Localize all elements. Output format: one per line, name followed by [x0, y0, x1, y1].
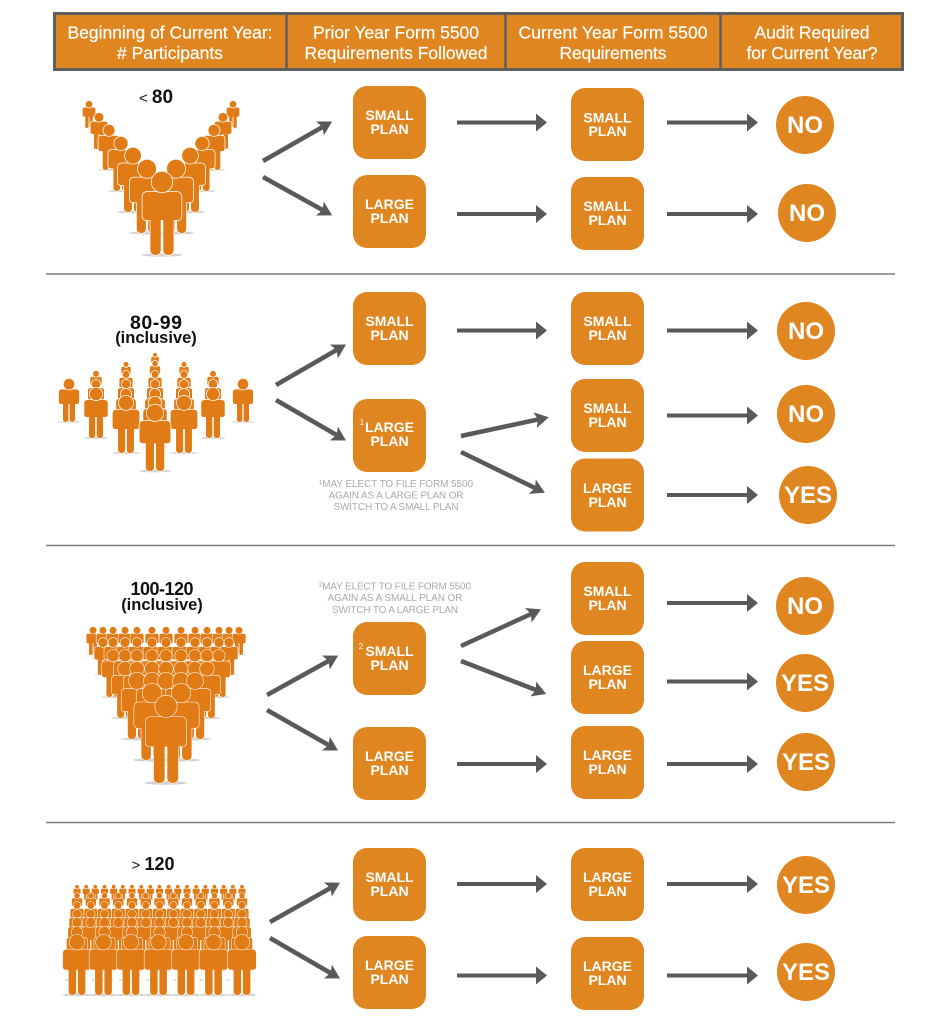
box: current small plan: PLAN — [588, 597, 627, 613]
box: prior small plan — [353, 86, 426, 159]
box: current large plan — [571, 458, 644, 532]
label: 80-99 inclusive: 80-99 — [130, 312, 182, 334]
people icon: crowd — [62, 885, 257, 996]
box: prior large plan: PLAN — [370, 971, 409, 987]
header: participants: # Participants — [117, 43, 223, 63]
box: current large plan: PLAN — [588, 883, 627, 899]
box: prior small plan with footnote marker: 2 — [359, 642, 364, 651]
box: prior small plan with footnote marker: PLAN — [370, 657, 409, 673]
badge: yes — [777, 943, 835, 1001]
badge: no — [777, 302, 835, 360]
people icon: inverted triangle formation — [86, 627, 246, 785]
badge: no — [776, 96, 834, 154]
label: over 120: > 120 — [132, 854, 174, 874]
box: prior large plan — [353, 727, 426, 800]
box: prior small plan: PLAN — [370, 883, 409, 899]
box: current small plan: PLAN — [588, 414, 627, 430]
box: prior small plan with footnote marker: SMALL — [365, 643, 414, 659]
footnote 1: ¹MAY ELECT TO FILE FORM 5500 — [319, 479, 473, 490]
badge: no — [777, 385, 835, 443]
box: prior large plan: LARGE — [365, 957, 414, 973]
box: prior large plan — [353, 936, 426, 1009]
header: current year: Requirements — [560, 43, 667, 63]
badge: yes — [776, 654, 834, 712]
box: current small plan: SMALL — [583, 110, 632, 126]
box: current large plan: PLAN — [588, 676, 627, 692]
badge: yes — [777, 856, 835, 914]
header: audit required: Audit Required — [754, 22, 870, 42]
box: current large plan: LARGE — [583, 480, 632, 496]
box: prior small plan: SMALL — [365, 869, 414, 885]
arrows — [270, 884, 747, 976]
arrows — [267, 603, 747, 764]
box: current small plan — [571, 292, 644, 365]
box: prior large plan with footnote marker: PLAN — [370, 433, 409, 449]
box: current large plan — [571, 641, 644, 714]
box: current small plan — [571, 562, 644, 635]
box: prior large plan: LARGE — [365, 196, 414, 212]
badge: yes — [779, 466, 837, 524]
box: prior small plan: PLAN — [370, 327, 409, 343]
box: prior small plan: SMALL — [365, 313, 414, 329]
box: current small plan — [571, 379, 644, 452]
box: current small plan: PLAN — [588, 327, 627, 343]
badge: yes: YES — [781, 670, 829, 697]
header: current year: Current Year Form 5500 — [518, 22, 708, 42]
people icon: arrow formation — [58, 353, 254, 472]
box: current small plan: SMALL — [583, 313, 632, 329]
badge: no: NO — [787, 593, 823, 620]
label: 80-99 inclusive: (inclusive) — [115, 329, 197, 347]
box: current large plan — [571, 726, 644, 799]
box: prior large plan: LARGE — [365, 748, 414, 764]
label: 100-120 inclusive: (inclusive) — [121, 596, 203, 614]
box: prior small plan: SMALL — [365, 107, 414, 123]
box: prior large plan with footnote marker: 1 — [360, 418, 365, 427]
footnote 1: SWITCH TO A SMALL PLAN — [334, 502, 458, 513]
header table — [54, 13, 902, 70]
panel: 100-120 participants — [86, 562, 835, 800]
arrows — [276, 330, 747, 495]
box: prior small plan — [353, 848, 426, 921]
box: prior small plan with footnote marker — [353, 622, 426, 695]
box: current large plan: PLAN — [588, 972, 627, 988]
badge: no: NO — [789, 200, 825, 227]
box: prior large plan with footnote marker: LARGE — [365, 419, 414, 435]
box: current small plan: SMALL — [583, 198, 632, 214]
header: audit required: for Current Year? — [746, 43, 878, 63]
box: current small plan: SMALL — [583, 583, 632, 599]
box: current small plan: SMALL — [583, 400, 632, 416]
footnote 2: ²MAY ELECT TO FILE FORM 5500 — [319, 582, 471, 592]
box: current large plan: LARGE — [583, 958, 632, 974]
arrows — [263, 122, 747, 214]
box: current large plan — [571, 937, 644, 1010]
label: under 80: < 80 — [139, 87, 173, 108]
header: participants: Beginning of Current Year: — [68, 22, 272, 42]
box: prior large plan: PLAN — [370, 210, 409, 226]
header: prior year: Requirements Followed — [304, 43, 488, 63]
box: current large plan — [571, 848, 644, 921]
box: current small plan — [571, 88, 644, 161]
people icon: V formation — [82, 101, 240, 257]
box: current large plan: PLAN — [588, 494, 627, 510]
footnote 2: SWITCH TO A LARGE PLAN — [332, 605, 458, 616]
box: current large plan: PLAN — [588, 761, 627, 777]
box: current small plan: PLAN — [588, 123, 627, 139]
box: current large plan: LARGE — [583, 869, 632, 885]
badge: no — [778, 184, 836, 242]
badge: no: NO — [788, 318, 824, 345]
panel: over 120 participants — [62, 848, 835, 1010]
panel: 80-99 participants — [58, 292, 837, 532]
badge: yes: YES — [782, 959, 830, 986]
footnote 1: AGAIN AS A LARGE PLAN OR — [328, 490, 464, 502]
box: prior large plan: PLAN — [370, 762, 409, 778]
badge: yes: YES — [784, 482, 832, 509]
badge: yes — [777, 733, 835, 791]
badge: no — [776, 577, 834, 635]
badge: no: NO — [787, 112, 823, 139]
badge: no: NO — [788, 401, 824, 428]
header: prior year: Prior Year Form 5500 — [313, 22, 479, 42]
box: prior small plan: PLAN — [370, 121, 409, 137]
badge: yes: YES — [782, 872, 830, 899]
box: prior small plan — [353, 292, 426, 365]
badge: yes: YES — [782, 749, 830, 776]
panel: under 80 participants — [82, 86, 836, 257]
box: current small plan — [571, 177, 644, 250]
label: 100-120 inclusive: 100-120 — [130, 579, 194, 599]
box: current large plan: LARGE — [583, 662, 632, 678]
box: current small plan: PLAN — [588, 212, 627, 228]
footnote 2: AGAIN AS A SMALL PLAN OR — [328, 593, 462, 604]
box: prior large plan — [353, 175, 426, 248]
box: prior large plan with footnote marker — [353, 399, 426, 472]
box: current large plan: LARGE — [583, 747, 632, 763]
